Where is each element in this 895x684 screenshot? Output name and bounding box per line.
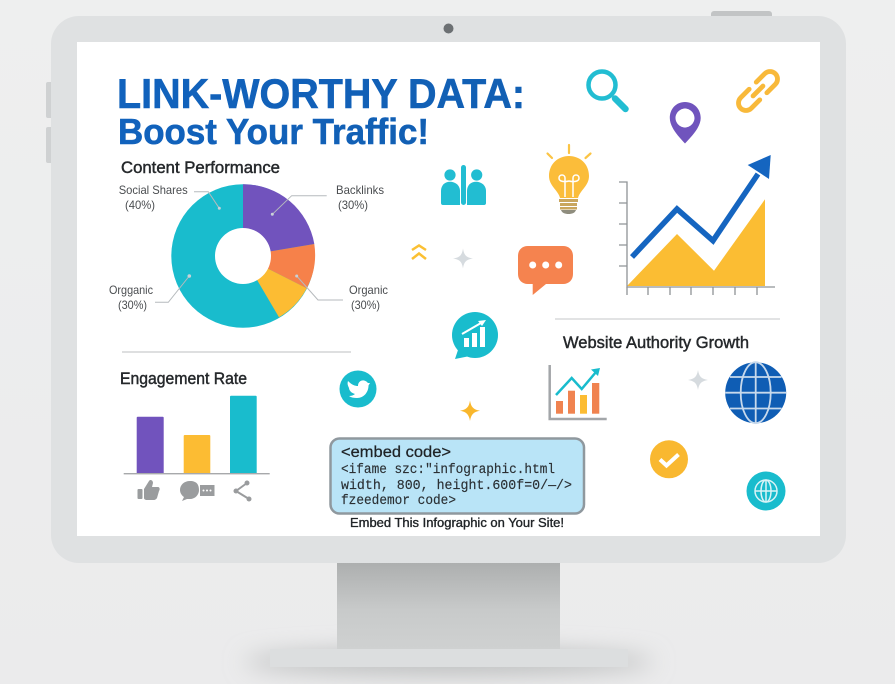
- heading: engagement rate: Engagement Rate: [120, 370, 247, 388]
- icon: share: [234, 480, 252, 502]
- label: orgganic: Orgganic: [109, 283, 153, 297]
- embed code box: <ifame szc:"infographic.html: [341, 463, 555, 478]
- icon: orange speech bubble: [518, 246, 573, 295]
- icon: people: [441, 165, 486, 205]
- title: LINK-WORTHY DATA:: [117, 70, 525, 117]
- label: backlinks: Backlinks: [336, 183, 384, 197]
- icon: magnifier: [588, 72, 626, 109]
- icon: globe: [725, 362, 786, 423]
- label: social shares: (40%): [125, 198, 155, 212]
- icon: thumbs up: [138, 480, 160, 500]
- icon: sparkle gold: [460, 400, 480, 421]
- side buttons: [46, 82, 54, 163]
- icon: twitter: [340, 370, 376, 408]
- monitor base: [270, 649, 628, 667]
- icon: comment bubbles: [180, 481, 214, 501]
- embed code box: fzeedemor code>: [341, 494, 456, 509]
- donut chart: [171, 184, 315, 328]
- title: Boost Your Traffic!: [118, 111, 429, 152]
- icon: map pin: [670, 102, 701, 144]
- icon: chain link: [735, 68, 781, 114]
- icon: mini chart: [550, 365, 607, 419]
- chart: traffic growth: [619, 155, 775, 295]
- screen: [77, 42, 820, 536]
- donut leader lines: [155, 192, 343, 302]
- icon: teal chart bubble: [452, 312, 498, 359]
- bar chart: engagement: [124, 396, 270, 474]
- icon: chevrons: [412, 246, 426, 259]
- label: social shares: Social Shares: [119, 183, 188, 197]
- label: social shares: [119, 183, 188, 212]
- embed caption: Embed This Infographic on Your Site!: [350, 516, 564, 530]
- label: organic: [349, 283, 388, 312]
- icon: light bulb: [548, 145, 590, 214]
- label: organic: (30%): [351, 298, 380, 312]
- label: orgganic: (30%): [118, 298, 147, 312]
- top button: [711, 11, 772, 21]
- embed code box: <embed code>: [341, 444, 451, 461]
- icon: sparkle grey right: [688, 370, 708, 390]
- icon: check badge: [650, 440, 688, 478]
- label: backlinks: (30%): [338, 198, 368, 212]
- heading: website authority growth: Website Authority Growth: [563, 334, 749, 352]
- monitor stand: [337, 563, 560, 649]
- heading: content performance: Content Performance: [121, 159, 280, 177]
- camera: [444, 24, 454, 34]
- icon: sparkle grey: [453, 248, 473, 268]
- bezel: [51, 16, 846, 563]
- label: orgganic: [109, 283, 153, 312]
- title: [117, 70, 525, 152]
- icon: small globe badge: [746, 472, 786, 510]
- label: backlinks: [336, 183, 384, 212]
- embed code box: [330, 438, 584, 514]
- embed code box: width, 800, height.600f=0/—/>: [341, 479, 572, 494]
- label: organic: Organic: [349, 283, 388, 297]
- base shadow: [244, 651, 654, 673]
